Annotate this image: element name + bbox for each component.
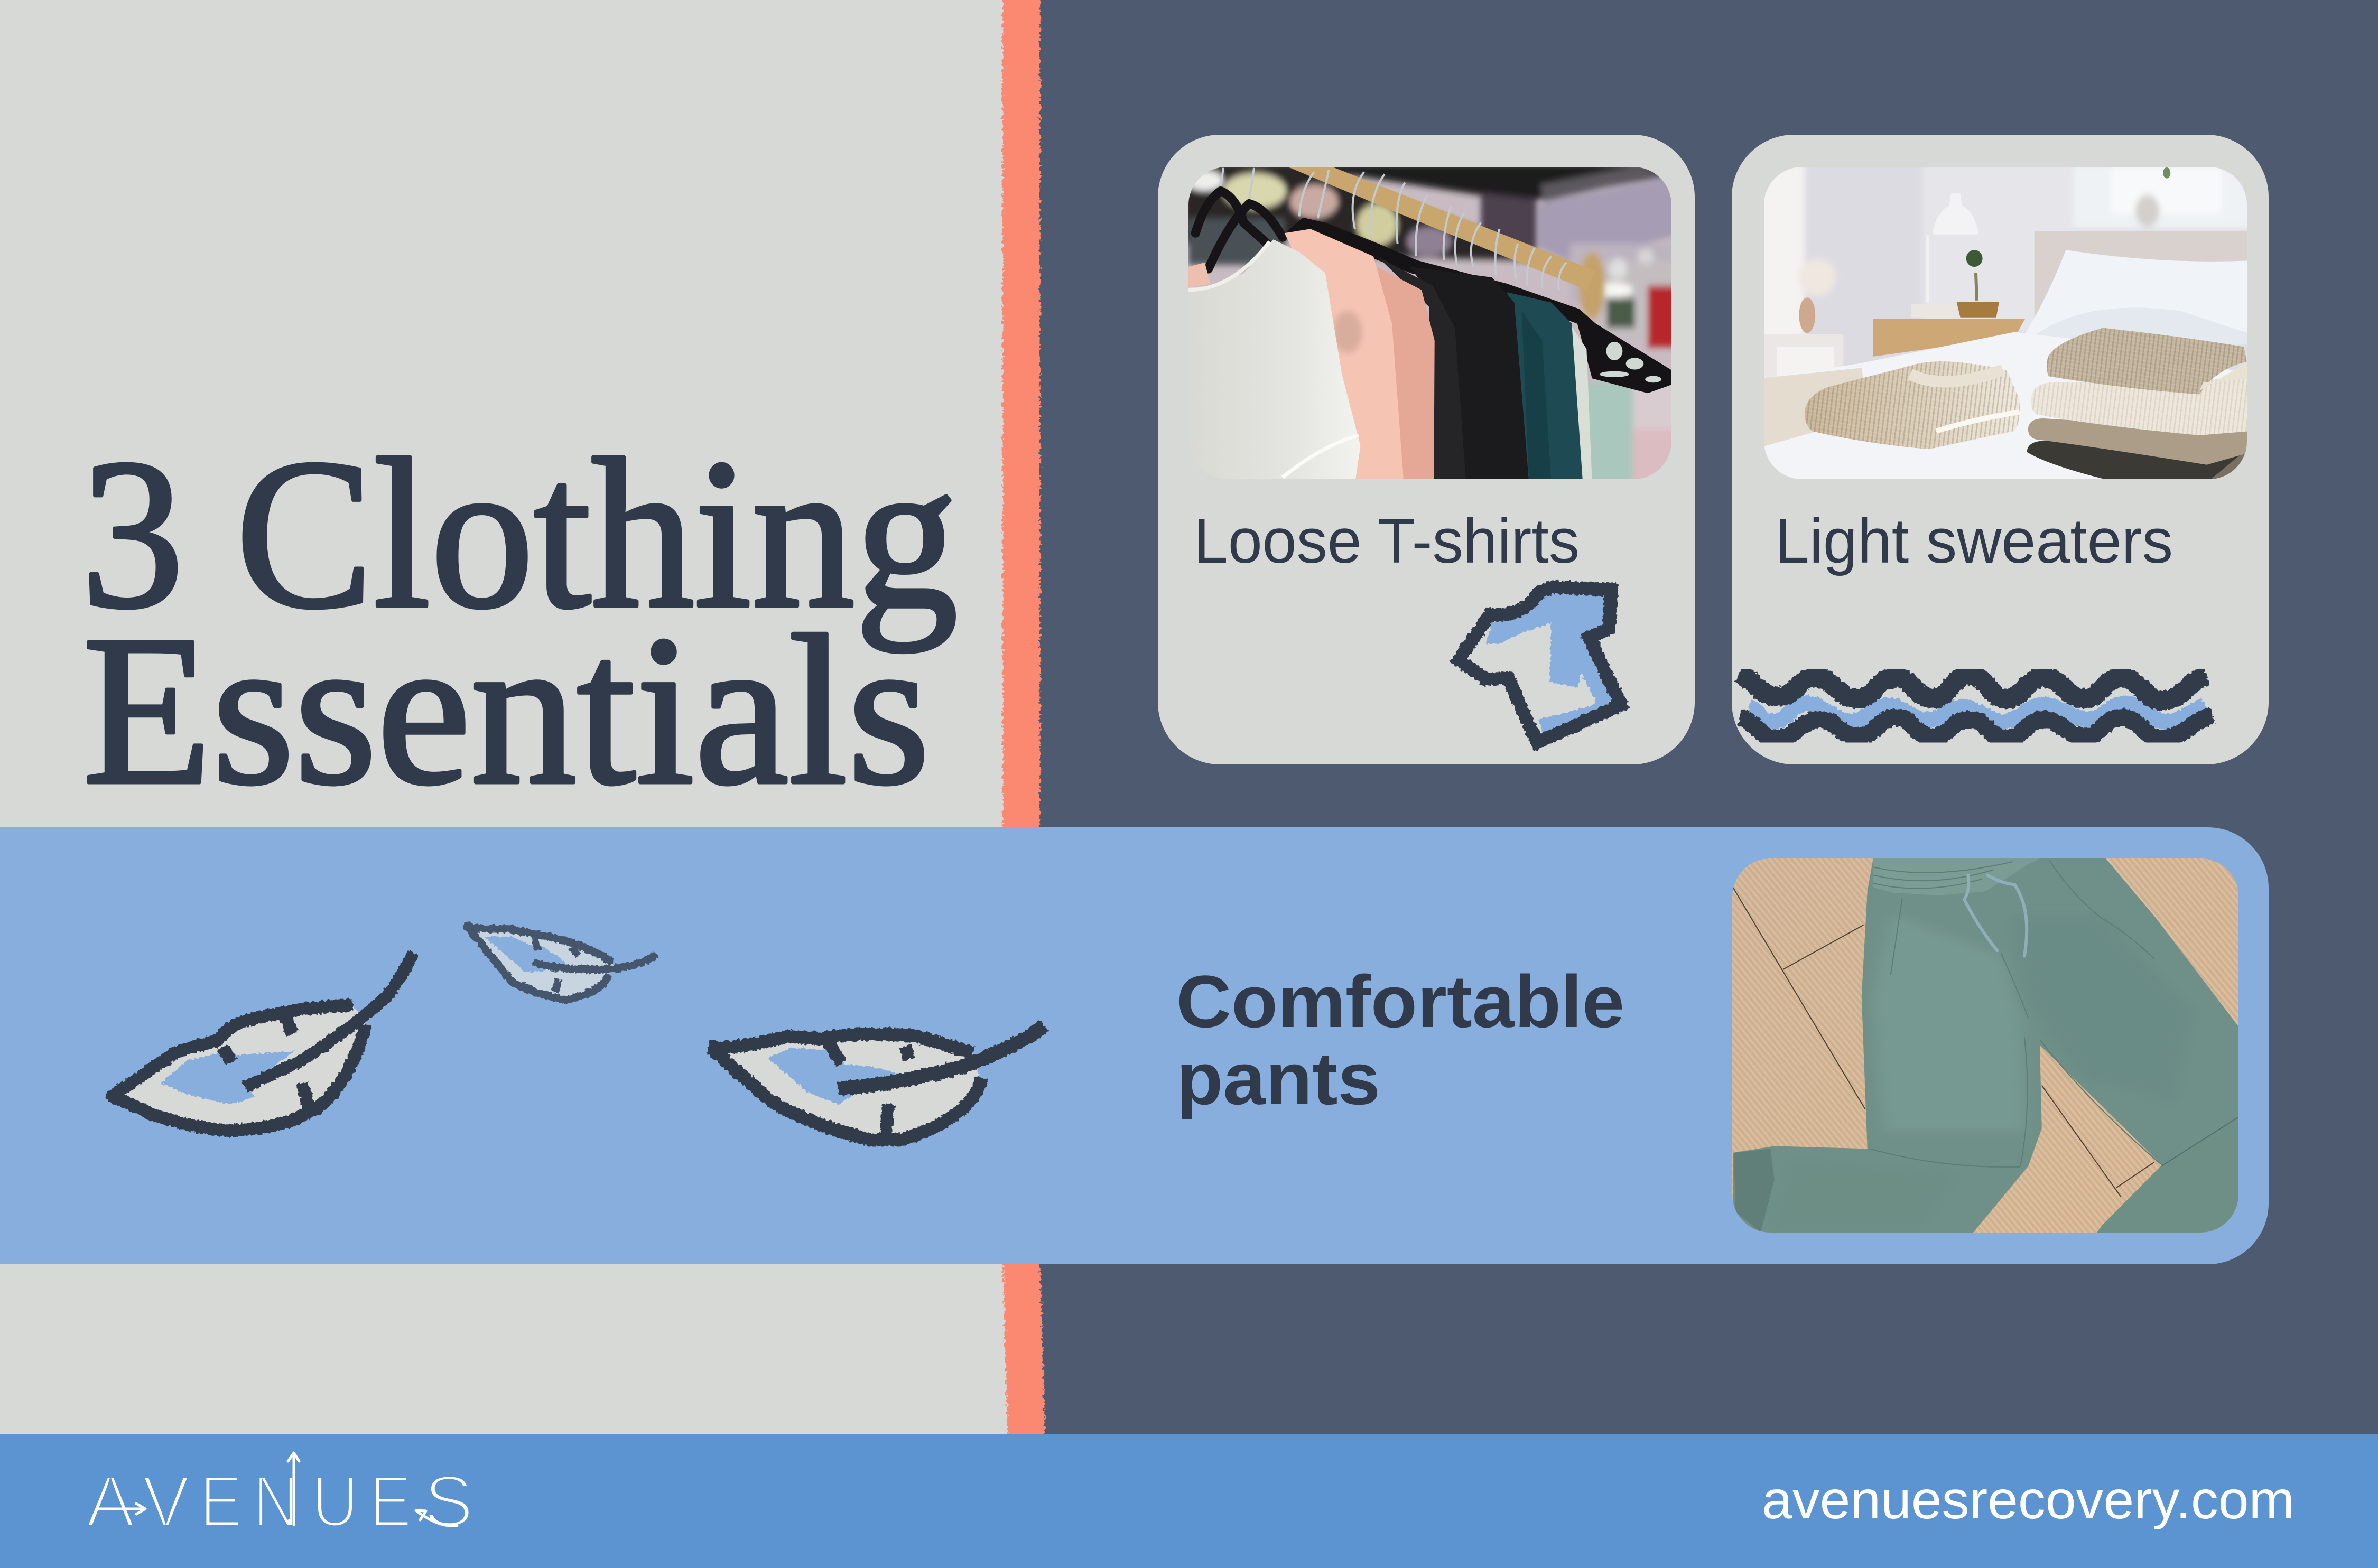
- icon: t-shirt: [1459, 587, 1621, 743]
- band label: [1176, 960, 1624, 1120]
- logo: Avenues wordmark: E: [369, 1461, 412, 1542]
- left cuff: [1734, 1149, 1775, 1233]
- waistband: [1873, 858, 2040, 895]
- card label: Light sweaters: [1775, 506, 2173, 576]
- black hangers: [1195, 191, 1283, 269]
- drawstrings: [1964, 875, 2027, 956]
- photo: green sweatpants on a wooden floor: [1730, 856, 2241, 1236]
- title: Essentials: [82, 591, 930, 829]
- left folded sweater: [1805, 361, 2020, 449]
- logo: Avenues wordmark: V: [142, 1461, 190, 1542]
- right sweater stack: [2027, 441, 2251, 484]
- clothing rail: [1288, 167, 1596, 290]
- footer bar: [0, 1434, 2378, 1568]
- icon: logo arrows: [97, 1453, 457, 1526]
- panel: comfortable pants band: [0, 827, 2269, 1264]
- band label: pants: [1176, 1037, 1380, 1120]
- logo: Avenues wordmark: N: [253, 1461, 299, 1542]
- title: 3 Clothing: [81, 415, 958, 653]
- background: right slate panel: [1020, 0, 2378, 1568]
- card label: Loose T-shirts: [1194, 506, 1580, 576]
- logo: Avenues wordmark: S: [424, 1461, 473, 1542]
- bedside items: [1873, 319, 2025, 357]
- panel: light sweaters card: [1732, 135, 2269, 764]
- pale garment edge: [1572, 326, 1592, 479]
- bed sheet: [1758, 332, 2251, 484]
- background: left grey panel: [0, 0, 1020, 1568]
- logo: Avenues wordmark: A: [86, 1461, 135, 1542]
- lamp: [1933, 193, 1979, 235]
- photo: clothes on a rail: [1184, 164, 1677, 484]
- icon: wavy lines: [1740, 673, 2213, 739]
- pants body: [1733, 858, 2238, 1236]
- icon: large left feather: [112, 953, 413, 1131]
- pillow: [2025, 250, 2247, 335]
- coral vertical stripe: [1002, 0, 1045, 1442]
- logo: Avenues wordmark: [86, 1461, 473, 1542]
- headboard: [2035, 231, 2247, 318]
- left blanket: [1758, 368, 1866, 448]
- photo: folded sweaters on a bed: [1758, 164, 2257, 484]
- title: [81, 415, 958, 829]
- icon: large right feather: [708, 1025, 1044, 1140]
- website url: avenuesrecovery.com: [1762, 1470, 2295, 1530]
- logo: Avenues wordmark: U: [312, 1461, 358, 1542]
- logo: Avenues wordmark: E: [200, 1461, 242, 1542]
- icon: small top feather: [464, 926, 656, 1000]
- lower right leg: [2094, 1118, 2241, 1236]
- band label: Comfortable: [1176, 960, 1624, 1043]
- panel: loose t-shirts card: [1158, 135, 1695, 764]
